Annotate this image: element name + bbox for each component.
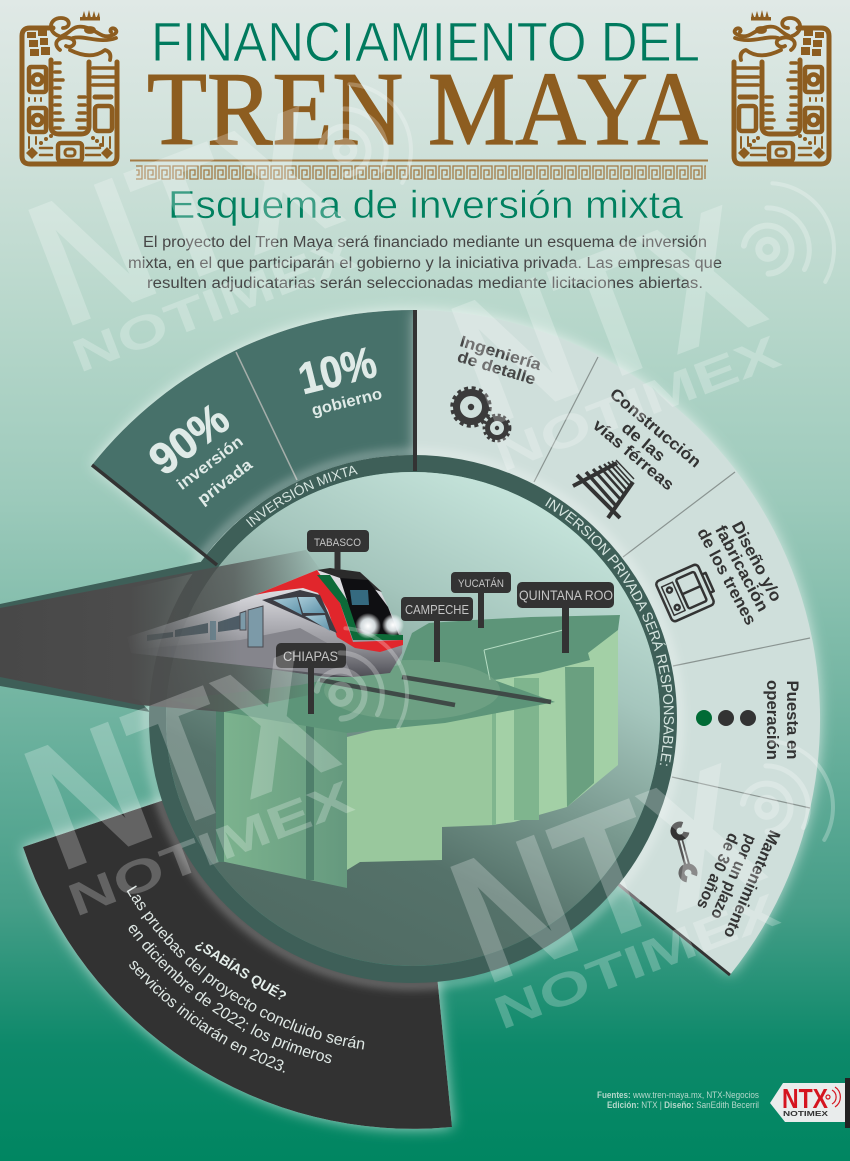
sign: Chiapas: CHIAPAS xyxy=(283,649,338,664)
intro text: mixta, en el que participarán el gobierno y la iniciativa privada. Las empresas que xyxy=(128,255,722,272)
icon: train front xyxy=(655,562,719,622)
text: ingeniería de detalle: de detalle xyxy=(455,349,538,389)
heading: sabías qué: ¿SABÍAS QUÉ? xyxy=(195,942,286,1000)
credits: Edición: NTX | Diseño: SanEdith Becerril xyxy=(607,1100,759,1110)
panel edge lines xyxy=(607,875,730,975)
text: ingeniería de detalle: Ingeniería xyxy=(458,333,543,374)
text: gobierno: gobierno xyxy=(310,386,384,420)
icon: gears xyxy=(452,388,510,441)
divider line between shares xyxy=(236,352,297,480)
sign: Chiapas xyxy=(276,643,346,714)
ring with curved labels xyxy=(91,310,677,983)
sign: Campeche xyxy=(401,597,473,662)
text: diseño y/o fabricación de los trenes: Diseño y/o xyxy=(728,519,785,605)
state highlight ellipse xyxy=(324,660,500,720)
divider: share panel edge xyxy=(92,465,217,565)
text: inversión privada: inversión xyxy=(174,433,247,494)
sign: Tabasco xyxy=(307,530,369,570)
icon: railway track xyxy=(573,460,634,518)
icon: left maya ornament xyxy=(22,10,117,164)
sign: Tabasco: TABASCO xyxy=(314,537,361,549)
logo: NTX Notimex: NTX xyxy=(782,1083,828,1114)
text: did you know body: en diciembre de 2022; los primeros xyxy=(128,924,332,1064)
map of the peninsula xyxy=(216,615,620,888)
panel: investment shares xyxy=(92,310,415,556)
text: diseño y/o fabricación de los trenes: de los trenes xyxy=(693,525,759,628)
text: did you know body: servicios iniciarán en 2023. xyxy=(129,960,285,1073)
text: mantenimiento: Mantenimiento xyxy=(720,827,783,941)
text: construcción de las vías férreas: de las xyxy=(618,419,669,465)
text: inversión privada: privada xyxy=(195,456,256,508)
watermark: top right: NOTIMEX xyxy=(488,325,787,481)
icon: wrench xyxy=(673,825,694,879)
text: construcción de las vías férreas: Construcción xyxy=(606,385,704,471)
panel: did you know xyxy=(16,793,462,1140)
text: construcción de las vías férreas xyxy=(589,385,704,494)
watermark: bottom left: NOTIMEX xyxy=(61,770,360,926)
intro text xyxy=(128,234,722,292)
watermark: bottom right: NTX xyxy=(427,726,784,1023)
logo: NTX Notimex: NOTIMEX xyxy=(783,1109,828,1118)
text: 10%: 10% xyxy=(294,338,381,404)
text: construcción de las vías férreas: vías férreas xyxy=(589,416,677,494)
map extrusion front face xyxy=(347,700,494,870)
watermark: top left: NOTIMEX xyxy=(65,226,364,382)
watermark: bottom right: NOTIMEX xyxy=(487,883,786,1039)
map extrusion right pillars xyxy=(492,627,618,825)
soft halo around ring xyxy=(147,453,679,985)
icon: progress dots xyxy=(696,710,756,726)
text: mantenimiento: de 30 años xyxy=(693,830,742,912)
text: did you know body: Las pruebas del proyecto concluido serán xyxy=(126,885,364,1050)
train carriages xyxy=(136,600,326,677)
sign: Yucatán: YUCATÁN xyxy=(458,577,504,590)
text: mantenimiento: por un plazo xyxy=(707,832,760,922)
train windows xyxy=(262,590,337,633)
text: inversión privada será responsable: INVERSION PRIVADA SERÁ RESPONSABLE: xyxy=(545,497,674,766)
greek key border xyxy=(130,160,708,180)
map top surface xyxy=(224,615,620,733)
rails xyxy=(320,677,551,705)
text: puesta en operación xyxy=(763,680,801,760)
text: inversión privada xyxy=(174,433,256,508)
credits xyxy=(597,1090,760,1110)
icon: right maya ornament xyxy=(734,10,829,164)
sign: Campeche: CAMPECHE xyxy=(405,602,469,617)
title: TREN MAYA xyxy=(147,50,708,167)
sign: Quintana Roo: QUINTANA ROO xyxy=(519,587,613,603)
panel: private investment responsibilities xyxy=(415,310,820,975)
headlights xyxy=(355,613,381,639)
logo: NTX Notimex xyxy=(770,1078,850,1128)
text: diseño y/o fabricación de los trenes xyxy=(693,519,785,628)
text: puesta en operación: operación xyxy=(763,680,781,760)
train red stripe xyxy=(255,570,403,652)
text: puesta en operación: Puesta en xyxy=(783,680,801,760)
text: diseño y/o fabricación de los trenes: fabricación xyxy=(711,522,772,615)
watermark: bottom left: NTX xyxy=(1,613,358,910)
text: 90%: 90% xyxy=(140,394,238,485)
subtitle: Esquema de inversión mixta xyxy=(168,184,683,227)
text: inversión mixta: INVERSIÓN MIXTA xyxy=(246,466,358,528)
inner disk xyxy=(166,472,660,966)
title: FINANCIAMIENTO DEL xyxy=(151,10,700,73)
tunnel beam xyxy=(0,550,335,712)
train xyxy=(127,568,404,677)
intro text: resulten adjudicatarias serán seleccionadas mediante licitaciones abiertas. xyxy=(147,275,703,292)
train nose xyxy=(240,570,403,677)
text: ingeniería de detalle xyxy=(455,333,543,389)
watermark: top right: NTX xyxy=(428,168,785,465)
map extrusion left columns xyxy=(216,708,347,888)
divider: vertical line on ring xyxy=(413,310,417,471)
sign: Yucatán xyxy=(451,572,511,628)
watermark: top left: NTX xyxy=(5,69,362,366)
intro text: El proyecto del Tren Maya será financiado mediante un esquema de inversión xyxy=(143,234,707,251)
sign: Quintana Roo xyxy=(517,582,614,653)
credits: Fuentes: www.tren-maya.mx, NTX-Negocios xyxy=(597,1090,760,1100)
